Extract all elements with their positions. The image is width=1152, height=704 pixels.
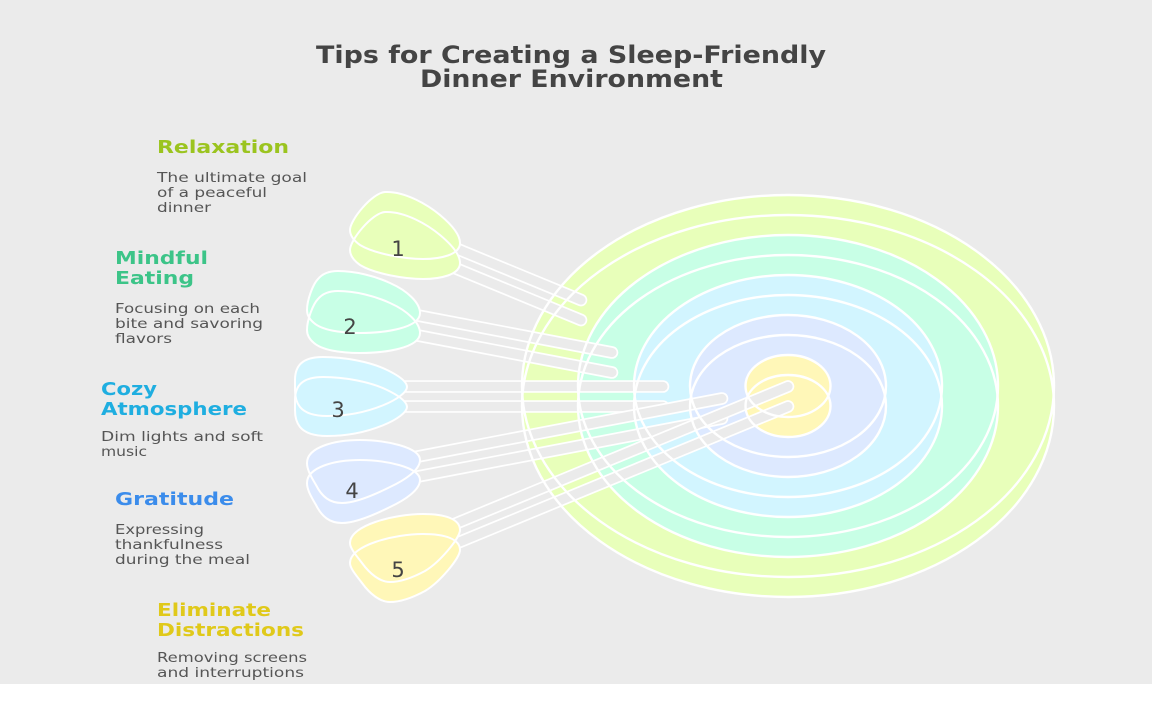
text block: Eliminate Distractions: Eliminate: [157, 600, 271, 621]
text block: Gratitude: Gratitude: [115, 489, 234, 510]
text block: Relaxation: The ultimate goal: [156, 170, 307, 186]
text block: Mindful Eating: Mindful: [115, 248, 208, 269]
badge 3: 3: [331, 398, 345, 422]
target ring outlines: [522, 195, 1054, 597]
badge 5: [350, 514, 460, 602]
title: Dinner Environment: [420, 65, 723, 93]
text block: Gratitude: thankfulness: [115, 537, 223, 553]
text block: Eliminate Distractions: Removing screens: [157, 650, 307, 666]
text block: Eliminate Distractions: and interruptions: [157, 665, 304, 681]
pointer 4: [410, 398, 722, 478]
badge 2: [307, 271, 420, 353]
badge 1: [350, 192, 460, 279]
pointer 5: [445, 386, 788, 548]
text block: Cozy Atmosphere: [101, 379, 263, 460]
text block: Relaxation: dinner: [157, 200, 212, 216]
badge 3: [295, 357, 407, 436]
target ring fills: [522, 195, 1054, 597]
text block: Mindful Eating: Eating: [115, 268, 194, 289]
text block: Gratitude: Expressing: [115, 522, 204, 538]
text block: Gratitude: during the meal: [115, 552, 250, 568]
text block: Mindful Eating: flavors: [115, 331, 172, 347]
badge 2: 2: [343, 315, 357, 339]
text block: Mindful Eating: Focusing on each: [115, 301, 260, 317]
text block: Relaxation: of a peaceful: [157, 185, 267, 201]
text block: Eliminate Distractions: Distractions: [157, 620, 304, 641]
badge 1: 1: [391, 237, 405, 261]
badge 4: 4: [345, 479, 359, 503]
title: Tips for Creating a Sleep-Friendly: [316, 41, 826, 69]
badge 4: [307, 440, 420, 523]
text block: Cozy Atmosphere: Atmosphere: [101, 399, 247, 420]
text block: Cozy Atmosphere: music: [101, 444, 147, 460]
text block: Gratitude: [115, 489, 250, 568]
text block: Eliminate Distractions: [157, 600, 307, 681]
pointer 2: [410, 314, 612, 372]
pointer 1: [450, 246, 581, 320]
text block: Cozy Atmosphere: Cozy: [101, 379, 157, 400]
text block: Relaxation: [156, 137, 307, 216]
title: [316, 41, 826, 93]
pointer 3: [395, 386, 663, 406]
text block: Relaxation: Relaxation: [157, 137, 289, 158]
text block: Cozy Atmosphere: Dim lights and soft: [101, 429, 263, 445]
pointer sticks: [395, 246, 788, 548]
text block: Mindful Eating: [115, 248, 263, 347]
text block: Mindful Eating: bite and savoring: [115, 316, 263, 332]
badge 5: 5: [391, 558, 405, 582]
